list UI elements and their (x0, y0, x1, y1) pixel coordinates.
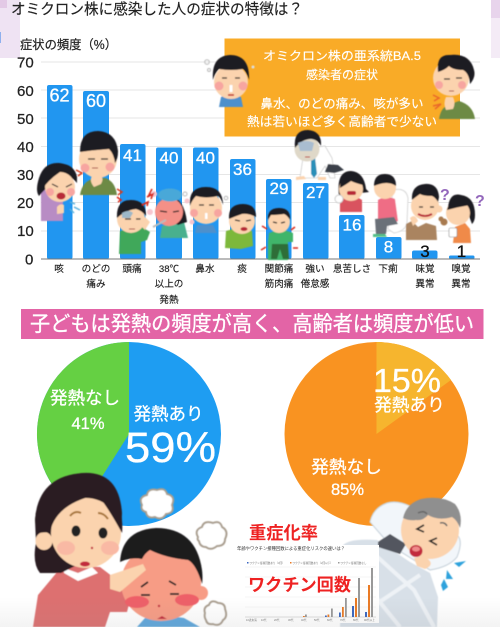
category labels: 関節痛 (265, 263, 294, 275)
y axis ticks: 30 (17, 167, 34, 184)
y axis ticks: 10 (17, 223, 34, 240)
category labels: のどの (82, 264, 110, 275)
y axis ticks: 40 (17, 139, 34, 156)
icon: man with phlegm (225, 204, 256, 249)
icon: woman on toilet (373, 174, 408, 237)
illustration: mother and child (33, 473, 226, 627)
elderly face (378, 498, 461, 569)
category labels: 筋肉痛 (265, 278, 294, 290)
callout: BA.5 symptoms: 鼻水、のどの痛み、咳が多い (260, 96, 424, 111)
category labels: 倦怠感 (301, 278, 330, 290)
category labels (54, 263, 471, 306)
icon: man with runny nose (callout) (205, 55, 254, 107)
callout: BA.5 symptoms: 熱は若いほど多く高齢者で少ない (247, 114, 437, 129)
icon: man with runny nose on bar (184, 187, 228, 233)
small chart legend: ワクチン接種回数あり（3回） (250, 561, 285, 565)
small chart x labels: 30代 (288, 618, 294, 622)
category labels: 味覚 (415, 263, 435, 275)
category labels: 以上の (155, 279, 183, 290)
y axis ticks (17, 54, 34, 268)
pie label: fever (125, 404, 216, 472)
bar values: 3 (420, 242, 430, 261)
bar values: 16 (343, 216, 361, 234)
category labels: 異常 (451, 278, 471, 290)
pie label: no fever (50, 388, 120, 433)
small chart x labels: 10代 (261, 618, 267, 622)
icon: coughing woman (37, 163, 80, 221)
red label: severe rate: 重症化率 (249, 523, 318, 543)
callout: BA.5 symptoms: 感染者の症状 (306, 67, 378, 82)
chart axis title: 症状の頻度（%） (20, 37, 117, 52)
pillow (370, 502, 460, 570)
category labels: 咳 (54, 263, 64, 275)
bars (47, 85, 474, 259)
browser edge strips (0, 0, 500, 58)
pie label: no fever: 85% (331, 481, 364, 499)
category labels: 息苦しさ (333, 263, 371, 275)
category labels: 痰 (237, 264, 247, 275)
category labels: 頭痛 (122, 263, 142, 275)
pie label: no fever: 発熱なし (50, 388, 120, 408)
small chart legend: ワクチン接種回数あり（2回以下） (292, 561, 333, 565)
icon: man with headache (117, 189, 152, 254)
illustrations on chart (37, 55, 475, 260)
bar values: 8 (384, 238, 393, 256)
bar values: 41 (123, 146, 142, 165)
category labels: 異常 (415, 278, 435, 290)
small chart legend: ワクチン接種回数なし (340, 561, 367, 565)
category labels: 発熱 (159, 294, 179, 306)
icon: man with joint pain (261, 208, 298, 260)
callout: BA.5 symptoms: オミクロン株の亜系統BA.5 (263, 48, 421, 63)
small chart x labels: 20代 (274, 618, 280, 622)
mother (33, 473, 130, 627)
icon: breathless woman (335, 171, 369, 212)
small chart x labels: 50代 (314, 618, 320, 622)
y axis ticks: 50 (17, 111, 34, 128)
callout: BA.5 symptoms (224, 38, 460, 136)
bar values (49, 86, 466, 261)
bar values: 27 (306, 183, 325, 202)
pie chart: children (37, 342, 221, 526)
y axis ticks: 20 (17, 195, 34, 212)
icon: woman with fever (142, 188, 188, 238)
pie label: no fever: 発熱なし (311, 457, 382, 477)
bar values: 29 (270, 179, 288, 198)
icon: man with sore throat on bar (76, 131, 122, 195)
pie label: fever (373, 362, 445, 415)
small chart x labels (246, 618, 375, 622)
pie label: fever: 59% (125, 424, 216, 472)
icon: woman with smell disorder (438, 194, 475, 243)
pie label: fever: 15% (373, 362, 441, 399)
small chart x labels: 60代 (327, 618, 333, 622)
small chart x labels: 40代 (301, 618, 307, 622)
small chart x labels: 70代 (340, 618, 346, 622)
category labels: 鼻水 (195, 263, 215, 275)
icon: question marks (440, 187, 485, 210)
y axis ticks: 60 (17, 83, 34, 100)
category labels: 嗅覚 (451, 263, 471, 275)
pie label: fever: 発熱あり (374, 395, 445, 415)
category labels: 痛み (86, 278, 106, 290)
small chart legend (247, 561, 367, 565)
small chart x labels: 90代以上 (364, 618, 375, 622)
category labels: 38℃ (159, 264, 180, 275)
icon: man with sore throat (callout) (433, 55, 475, 119)
small vaccination chart (236, 545, 379, 623)
child (110, 528, 208, 627)
small chart x labels: 10歳未満 (246, 618, 257, 622)
title: オミクロン株に感染した人の症状の特徴は？ (11, 1, 303, 18)
steam puffs (141, 489, 226, 625)
bar values: 1 (457, 242, 466, 261)
icon: fatigued man (294, 130, 344, 180)
small chart bars (303, 568, 373, 617)
banner: children have fever more often: 子どもは発熱の頻度が高く、高齢者は頻度が低い (30, 313, 474, 336)
illustration: elderly patient in bed (340, 498, 466, 627)
icon: man with taste disorder (406, 184, 442, 240)
blanket (340, 540, 438, 627)
sweat drops (441, 561, 466, 591)
pie chart: elderly (284, 342, 468, 526)
category labels: 強い (305, 263, 325, 275)
y axis ticks: 70 (17, 54, 34, 72)
pie label: fever: 発熱あり (134, 404, 204, 424)
pie label: no fever: 41% (71, 415, 105, 433)
small chart x labels: 80代 (353, 618, 359, 622)
bar values: 60 (86, 91, 106, 111)
small chart title: 年齢やワクチン接種回数による重症化リスクの違いは？ (237, 545, 345, 552)
pie label: no fever (311, 457, 382, 499)
y axis ticks: 0 (25, 252, 33, 268)
bar values: 40 (160, 148, 178, 168)
bar values: 62 (49, 86, 70, 106)
bar values: 40 (196, 148, 215, 168)
icon: question marks: ? (440, 187, 450, 204)
bar values: 36 (233, 160, 252, 179)
red label: vaccine doses: ワクチン回数 (248, 575, 351, 595)
bar chart: symptom frequency (17, 37, 480, 306)
category labels: 下痢 (378, 264, 398, 275)
icon: question marks: ? (475, 193, 485, 210)
